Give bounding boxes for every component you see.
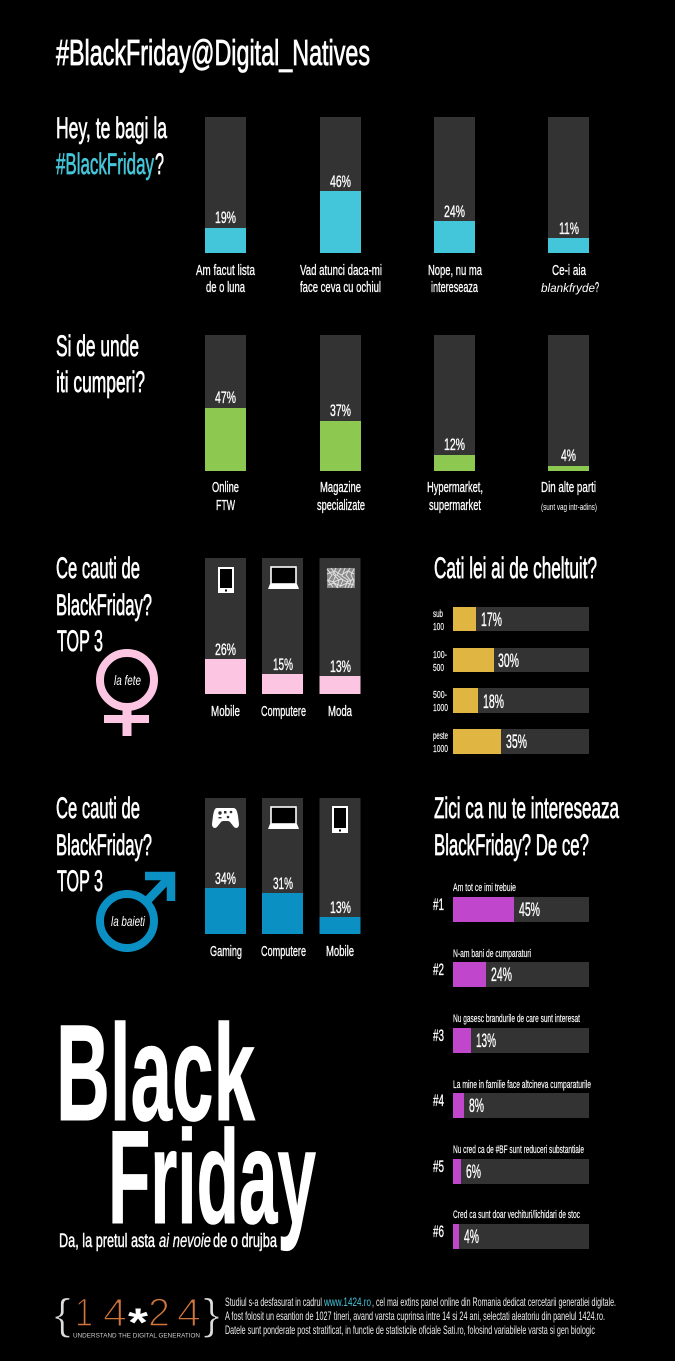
bar: under 100: sub xyxy=(433,608,443,620)
bar: 19%: Am facut lista xyxy=(196,262,255,279)
bar: mobile 13% xyxy=(320,798,360,960)
reason 2: 24% xyxy=(491,965,512,986)
logo: 14*24: * xyxy=(128,1301,149,1345)
section 6: reasons for not caring xyxy=(433,792,619,1249)
bar: 47%: Online xyxy=(212,479,239,496)
bar: 11%: Ce-i aia xyxy=(552,262,586,279)
logo: 14*24: 1 xyxy=(75,1291,93,1335)
reason 1: #1 xyxy=(433,895,444,914)
bar: under 100: 100 xyxy=(433,621,444,633)
heading: top 3 girls xyxy=(56,552,152,658)
reason 5 xyxy=(433,1144,589,1184)
bar: 37%: Magazine xyxy=(320,479,361,496)
reason 2: #2 xyxy=(433,960,444,979)
bar: mobile 26%: Mobile xyxy=(211,703,240,720)
reason 1: 45% xyxy=(519,900,540,921)
bar: 46%: Vad atunci daca-mi xyxy=(300,262,382,279)
bar: 47% xyxy=(205,335,246,514)
heading: top 3 girls: TOP 3 xyxy=(57,625,103,658)
heading: top 3 boys: Ce cauti de xyxy=(56,792,140,825)
reason 6: 4% xyxy=(464,1227,479,1248)
bar: 24%: 24% xyxy=(444,202,465,221)
bar: 37%: 37% xyxy=(330,401,351,420)
icon: fashion pattern xyxy=(327,568,355,588)
bar: 12%: Hypermarket, xyxy=(427,479,483,496)
heading: de unde cumperi: Si de unde xyxy=(56,330,139,363)
bar: 4%: Din alte parti xyxy=(541,479,596,496)
bar: 19%: de o luna xyxy=(206,279,245,296)
heading: top 3 boys: BlackFriday? xyxy=(56,829,152,862)
logo: 14*24: 2 xyxy=(148,1291,170,1335)
big slogan: Black Friday: Black xyxy=(56,997,255,1150)
bar: 12%: supermarket xyxy=(429,497,482,514)
bar: 46%: face ceva cu ochiul xyxy=(300,279,381,296)
heading: te bagi la Black Friday xyxy=(56,112,167,181)
bar: 47%: 47% xyxy=(215,388,236,407)
icon: laptop xyxy=(268,567,299,589)
bar: 100-500 xyxy=(433,648,589,674)
bar: 500-1000 xyxy=(433,688,589,714)
tagline: ai nevoie xyxy=(159,1231,211,1252)
bar: 500-1000: 500- xyxy=(433,689,447,701)
methodology note xyxy=(225,1295,616,1337)
icon: male symbol: la baieti xyxy=(111,913,146,929)
reason 4 xyxy=(433,1079,591,1118)
reason 3: #3 xyxy=(433,1026,444,1045)
bar: 24%: intereseaza xyxy=(431,279,478,296)
logo: 14*24: { xyxy=(54,1290,71,1339)
section 2: where you buy xyxy=(56,330,597,514)
bar: 500-1000: 1000 xyxy=(433,702,448,714)
bar: mobile 26% xyxy=(205,558,246,720)
bar: over 1000: 35% xyxy=(506,732,527,753)
icon: phone xyxy=(332,807,348,833)
icon: phone xyxy=(218,568,234,593)
bar: 100-500: 500 xyxy=(433,662,444,674)
bar: 37%: specializate xyxy=(317,497,365,514)
bar: 500-1000: 18% xyxy=(483,692,504,713)
big slogan: Black Friday xyxy=(56,997,316,1252)
reason 3: 13% xyxy=(476,1031,496,1052)
bar: 4%: 4% xyxy=(561,446,576,465)
section 1: participation xyxy=(56,112,599,296)
section 4: spending panel xyxy=(433,552,597,755)
reason 4: 8% xyxy=(469,1096,484,1117)
heading: de unde cumperi xyxy=(56,330,145,399)
bar: 4%: (sunt vag intr-adins) xyxy=(541,502,597,512)
bar: 4% xyxy=(541,335,597,512)
reason 6: #6 xyxy=(433,1222,444,1241)
methodology note: www.1424.ro xyxy=(323,1295,371,1309)
bar: gaming 34%: Gaming xyxy=(210,943,242,960)
big slogan: Black Friday: Friday xyxy=(108,1104,316,1252)
icon: female symbol xyxy=(100,653,154,736)
logo: 14*24: UNDERSTAND THE DIGITAL GENERATION xyxy=(73,1332,200,1340)
reason 5: #5 xyxy=(433,1157,444,1176)
bar: 19%: 19% xyxy=(215,208,236,227)
reason 5: 6% xyxy=(466,1162,481,1183)
reason 5: Nu cred ca de #BF sunt reduceri substantiale xyxy=(453,1144,584,1156)
bar: 37% xyxy=(317,335,365,514)
bar: 47%: FTW xyxy=(216,497,235,514)
reason 2: N-am bani de cumparaturi xyxy=(453,948,531,960)
logo: 14*24: 4 xyxy=(103,1291,127,1335)
reason 4: La mine in familie face altcineva cumparaturile xyxy=(453,1079,591,1091)
title: #BlackFriday@Digital_Natives xyxy=(56,32,370,73)
bar: under 100 xyxy=(433,607,589,633)
methodology note: Studiul s-a desfasurat in cadrul xyxy=(225,1295,322,1309)
bar: 12%: 12% xyxy=(444,435,465,454)
icon: male symbol xyxy=(100,876,171,948)
bar: 46% xyxy=(300,117,382,296)
bar: computers 15%: Computere xyxy=(261,703,306,720)
reason 6: Cred ca sunt doar vechituri/lichidari de stoc xyxy=(453,1209,580,1221)
bar: over 1000 xyxy=(433,729,589,755)
bar: 100-500: 100- xyxy=(433,649,447,661)
bar: computers 15%: 15% xyxy=(273,655,293,674)
bar: over 1000: 1000 xyxy=(433,743,448,755)
logo: 14*24: 4 xyxy=(177,1291,201,1335)
heading: why not interested xyxy=(434,792,619,862)
reason 3 xyxy=(433,1013,589,1053)
bar: computers 31%: Computere xyxy=(261,943,306,960)
bar: gaming 34% xyxy=(205,798,246,960)
tagline xyxy=(59,1231,277,1252)
bar: over 1000: peste xyxy=(433,730,448,742)
heading: te bagi la Black Friday: ? xyxy=(155,148,164,181)
bar: mobile 13%: 13% xyxy=(330,898,351,917)
icon: laptop xyxy=(268,807,299,829)
reason 1 xyxy=(433,882,589,922)
bar: 11%: blankfryde xyxy=(541,281,595,295)
section 5: top 3 for boys xyxy=(56,792,360,960)
bar: 24%: Nope, nu ma xyxy=(428,262,482,279)
logo: 14*24 xyxy=(54,1290,220,1345)
bar: fashion 13%: 13% xyxy=(330,657,351,676)
reason 4: #4 xyxy=(433,1091,444,1110)
bar: 46%: 46% xyxy=(330,172,351,191)
icon: female symbol: la fete xyxy=(114,672,141,688)
reason 3: Nu gasesc brandurile de care sunt interesat xyxy=(453,1013,580,1025)
bar: gaming 34%: 34% xyxy=(215,869,236,888)
bar: 12% xyxy=(427,335,483,514)
heading: top 3 boys: TOP 3 xyxy=(57,865,103,898)
bar: 100-500: 30% xyxy=(498,651,519,672)
reason 6 xyxy=(433,1209,589,1249)
icon: game controller xyxy=(212,808,239,828)
heading: de unde cumperi: iti cumperi? xyxy=(56,366,145,399)
reason 1: Am tot ce imi trebuie xyxy=(453,882,516,894)
bar: mobile 26%: 26% xyxy=(215,640,236,659)
bar: under 100: 17% xyxy=(481,610,502,631)
bar: 24% xyxy=(428,117,482,296)
logo: 14*24: } xyxy=(203,1290,220,1339)
bar: computers 31% xyxy=(261,798,306,960)
heading: te bagi la Black Friday: #BlackFriday xyxy=(56,148,154,181)
heading: top 3 girls: Ce cauti de xyxy=(56,552,140,585)
bar: fashion 13% xyxy=(320,558,360,720)
bar: 11% xyxy=(541,117,599,296)
section 3: top 3 for girls xyxy=(56,552,360,736)
bar: mobile 13%: Mobile xyxy=(326,943,354,960)
heading: te bagi la Black Friday: Hey, te bagi la xyxy=(56,112,167,145)
bar: 19% xyxy=(196,117,255,296)
tagline: de o drujba xyxy=(213,1231,277,1252)
bar: fashion 13%: Moda xyxy=(328,703,352,720)
bar: computers 31%: 31% xyxy=(273,874,293,893)
infographic canvas: ? xyxy=(595,279,599,296)
reason 2 xyxy=(433,948,589,987)
heading: top 3 girls: BlackFriday? xyxy=(56,589,152,622)
bar: computers 15% xyxy=(261,558,306,720)
bar: 11%: 11% xyxy=(559,219,579,238)
tagline: Da, la pretul asta xyxy=(59,1231,155,1252)
heading: top 3 boys xyxy=(56,792,152,898)
